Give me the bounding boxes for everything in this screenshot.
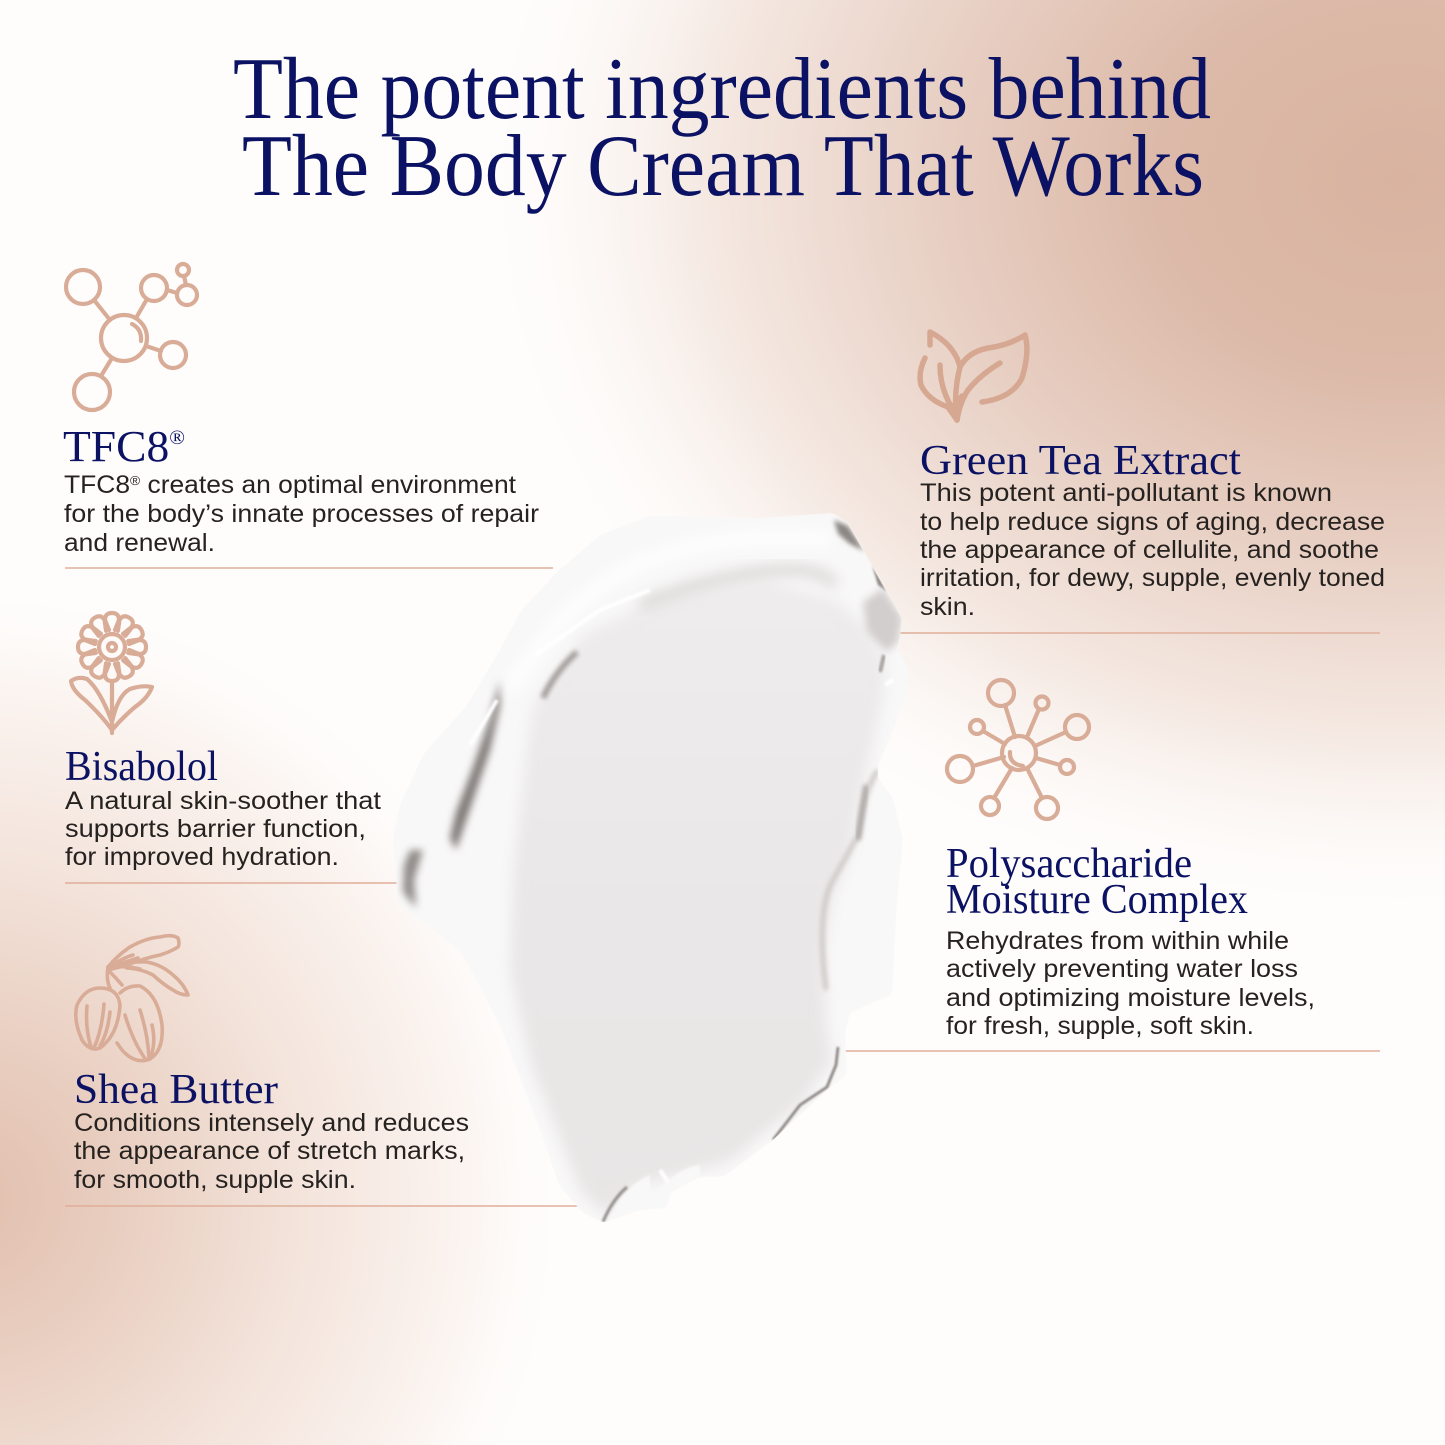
text: Bisabolol description: A natural skin-soother that [65,787,381,815]
text: Green Tea description [920,479,1385,621]
flat face [510,580,885,1215]
text: Shea Butter description: Conditions intensely and reduces [74,1109,469,1137]
text: Polysaccharide description: actively preventing water loss [946,955,1298,983]
text: TFC8 description: and renewal. [64,529,215,557]
title: The potent ingredients behind [233,41,1211,138]
text: Polysaccharide description [946,927,1315,1040]
text: Green Tea description: skin. [920,593,975,621]
text: Shea Butter description [74,1109,469,1194]
icon: molecule [66,264,197,410]
panel: Green Tea Extract [920,332,1385,621]
text: Green Tea description: This potent anti-pollutant is known [920,479,1332,507]
icon: shea nuts [76,936,188,1061]
panel: TFC8 [63,264,539,557]
heading: Green Tea Extract: Green Tea Extract [920,438,1241,484]
heading: Polysaccharide Moisture Complex: Polysaccharide [946,841,1192,887]
text: TFC8 description: for the body’s innate processes of repair [64,500,539,528]
text: TFC8 description [64,471,539,557]
title [233,41,1211,215]
heading: TFC8: TFC8 [63,422,166,471]
text: Shea Butter description: for smooth, supple skin. [74,1166,356,1194]
panel: Shea Butter [74,936,469,1194]
text: Shea Butter description: the appearance of stretch marks, [74,1137,465,1165]
text: Bisabolol description: supports barrier function, [65,815,366,843]
text: TFC8 description: ® [130,473,141,488]
heading: Polysaccharide Moisture Complex: Moisture Complex [946,877,1248,923]
heading: TFC8: ® [169,427,185,449]
text: Green Tea description: the appearance of cellulite, and soothe [920,536,1379,564]
text: Green Tea description: to help reduce signs of aging, decrease [920,508,1385,536]
heading: Shea Butter: Shea Butter [74,1067,278,1113]
text: Bisabolol description: for improved hydration. [65,843,339,871]
heading: Bisabolol: Bisabolol [65,744,218,790]
title: The Body Cream That Works [242,118,1204,215]
panel: Bisabolol [65,613,381,871]
icon: leaves [920,332,1027,420]
icon: polysaccharide molecule [947,680,1089,819]
panel: Polysaccharide Moisture Complex [946,680,1315,1040]
image: cream swatch [393,513,908,1223]
text: Polysaccharide description: and optimizing moisture levels, [946,984,1315,1012]
text: Bisabolol description [65,787,381,871]
text: Polysaccharide description: Rehydrates from within while [946,927,1289,955]
heading: Polysaccharide Moisture Complex [946,841,1248,923]
text: TFC8 description: creates an optimal environment [140,471,516,499]
text: TFC8 description: TFC8 [64,471,126,499]
text: Green Tea description: irritation, for dewy, supple, evenly toned [920,564,1385,592]
text: Polysaccharide description: for fresh, supple, soft skin. [946,1012,1254,1040]
icon: flower [71,613,152,733]
